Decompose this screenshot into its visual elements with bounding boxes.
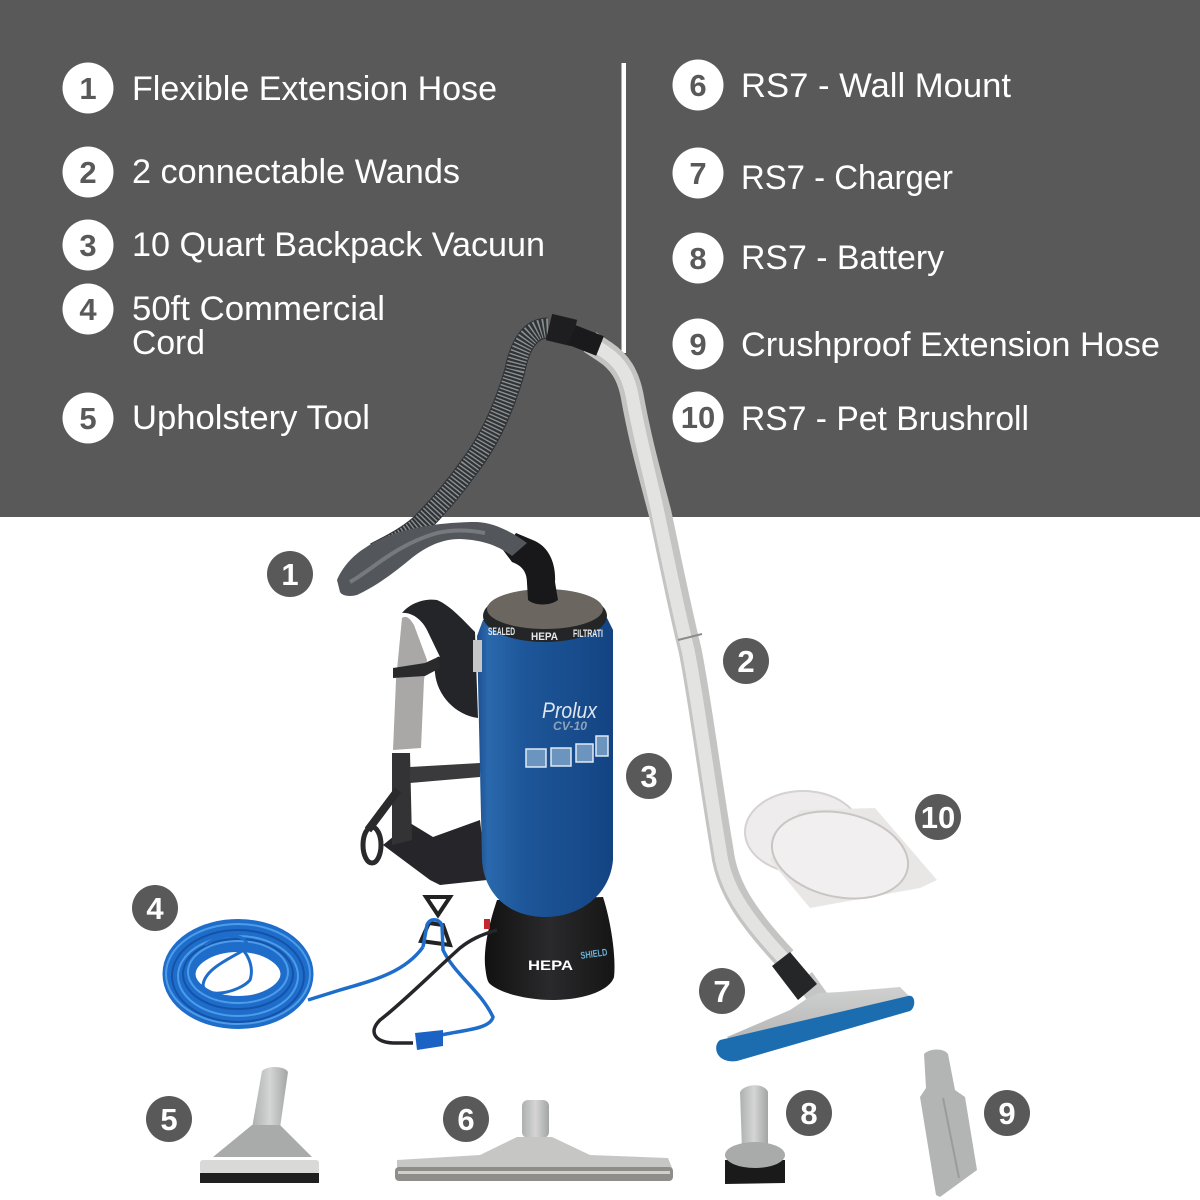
callout 9 [984,1090,1030,1136]
waist belt [383,820,487,885]
callout 1 [267,551,313,597]
collar [725,1142,785,1168]
callout 8: 8 [800,1096,818,1131]
base [485,897,615,1000]
coil strands [166,924,310,1024]
side latch [473,640,482,672]
legend: right column [672,60,1160,442]
nozzle body [727,987,910,1045]
cord reel [166,920,497,1050]
lid ring lettering [488,626,603,643]
vertical strap [392,753,412,845]
callout 10: 10 [921,800,955,835]
callout 3: 3 [640,759,658,794]
neck [740,1085,768,1150]
callout 4 [132,885,178,931]
blue strip [716,996,914,1061]
elbow connector [503,533,558,604]
legend item 3 [62,220,545,270]
pad strap [393,657,440,678]
filter sheet [770,808,937,908]
tool: floor brush [395,1100,673,1181]
wand highlight [590,342,783,958]
callout 8 [786,1090,832,1136]
lip [395,1167,673,1181]
neck [252,1067,288,1128]
callout 2 [723,638,769,684]
neck [797,972,832,1008]
vacuum canister [473,533,615,1000]
legend item 6: 6 [689,68,707,103]
crevice body [920,1050,977,1197]
callout 2: 2 [737,644,755,679]
legend item 1: Flexible Extension Hose [132,70,497,108]
column divider [622,63,626,353]
grey shoulder pad [393,617,427,750]
legend item 4: 4 [79,292,97,327]
coil shadows [172,930,304,1022]
legend item 5 [62,392,370,444]
legend item 2 [62,146,460,198]
legend item 3: 10 Quart Backpack Vacuun [132,226,545,264]
tool: dust brush [725,1085,785,1184]
filter front [764,800,916,910]
black power lead [374,930,497,1043]
black shoulder cushion [402,600,478,718]
lid top [487,589,603,629]
comb [200,1160,319,1174]
tool: upholstery [200,1067,319,1183]
model: CV-10 [553,719,587,733]
callout 4: 4 [146,891,164,926]
legend item 9: 9 [689,327,707,362]
hose highlight [350,530,485,582]
callout 5 [146,1096,192,1142]
legend item 8 [672,232,945,284]
lower clip rings [421,897,450,945]
tool: crevice [920,1050,977,1197]
legend item 6: RS7 - Wall Mount [741,67,1011,105]
callout 1: 1 [281,557,299,592]
callout 7 [699,968,745,1014]
head [397,1137,673,1172]
legend item 5: 5 [79,401,97,436]
legend item 1 [62,62,497,114]
wand tube [590,342,785,958]
base label: HEPA [528,957,573,973]
legend item 8: RS7 - Battery [741,239,945,277]
lid ring [483,590,607,642]
brand script: Prolux [542,698,598,723]
legend item 1: 1 [79,71,97,106]
telescopic wand [549,327,785,958]
callout 5: 5 [160,1102,178,1137]
legend item 7 [672,148,953,198]
legend item 10 [672,392,1029,442]
belt buckle strap [410,763,480,783]
bristles [200,1173,319,1183]
legend item 3: 3 [79,228,97,263]
legend item 4: Cord [132,324,205,362]
lid ring lettering: FILTRATI [573,628,603,640]
callout 9: 9 [998,1096,1016,1131]
filter back [745,791,861,873]
callout 3 [626,753,672,799]
head [213,1125,312,1157]
wand joint [678,634,702,640]
cord loop at clip [423,920,493,1037]
legend item 8: 8 [689,241,707,276]
cord run to canister [308,947,423,1000]
hose body [337,522,527,596]
legend item 7: RS7 - Charger [741,159,953,197]
hose cuff [549,327,574,333]
red switch [484,919,490,929]
shield label: SHIELD [580,947,608,962]
extension hose rising over panel [375,328,548,553]
lid ring lettering: HEPA [531,631,558,643]
legend item 5: Upholstery Tool [132,399,370,437]
panel: dark header [0,0,1200,517]
crevice ridge [943,1098,959,1178]
wand sleeve [572,335,600,346]
legend item 7: 7 [689,156,707,191]
legend item 2: 2 connectable Wands [132,153,460,191]
collar [772,952,817,1000]
legend item 4 [62,284,385,362]
legend item 9 [672,318,1160,370]
filters [745,791,937,910]
main hose [337,522,527,596]
bristles [725,1160,785,1184]
neck [522,1100,549,1138]
callout 7: 7 [713,974,731,1009]
side loop [363,790,398,863]
backpack harness [363,600,487,945]
legend item 10: RS7 - Pet Brushroll [741,400,1029,438]
legend item 4: 50ft Commercial [132,290,385,328]
legend item 10: 10 [681,400,715,435]
legend item 9: Crushproof Extension Hose [741,326,1160,364]
inner cord loop [203,936,251,993]
plug [415,1030,443,1050]
legend item 6 [672,60,1011,110]
floor nozzle with blue strip [716,952,914,1061]
legend: left column [62,62,545,444]
numbered callouts [132,551,1030,1142]
callout 6 [443,1096,489,1142]
blue body [477,618,613,917]
callout 6: 6 [457,1102,475,1137]
lid ring lettering: SEALED [488,626,515,638]
callout 10 [915,794,961,840]
feature icons [526,736,608,767]
legend item 2: 2 [79,155,97,190]
lip band [398,1171,670,1174]
coil ring [179,936,297,1012]
